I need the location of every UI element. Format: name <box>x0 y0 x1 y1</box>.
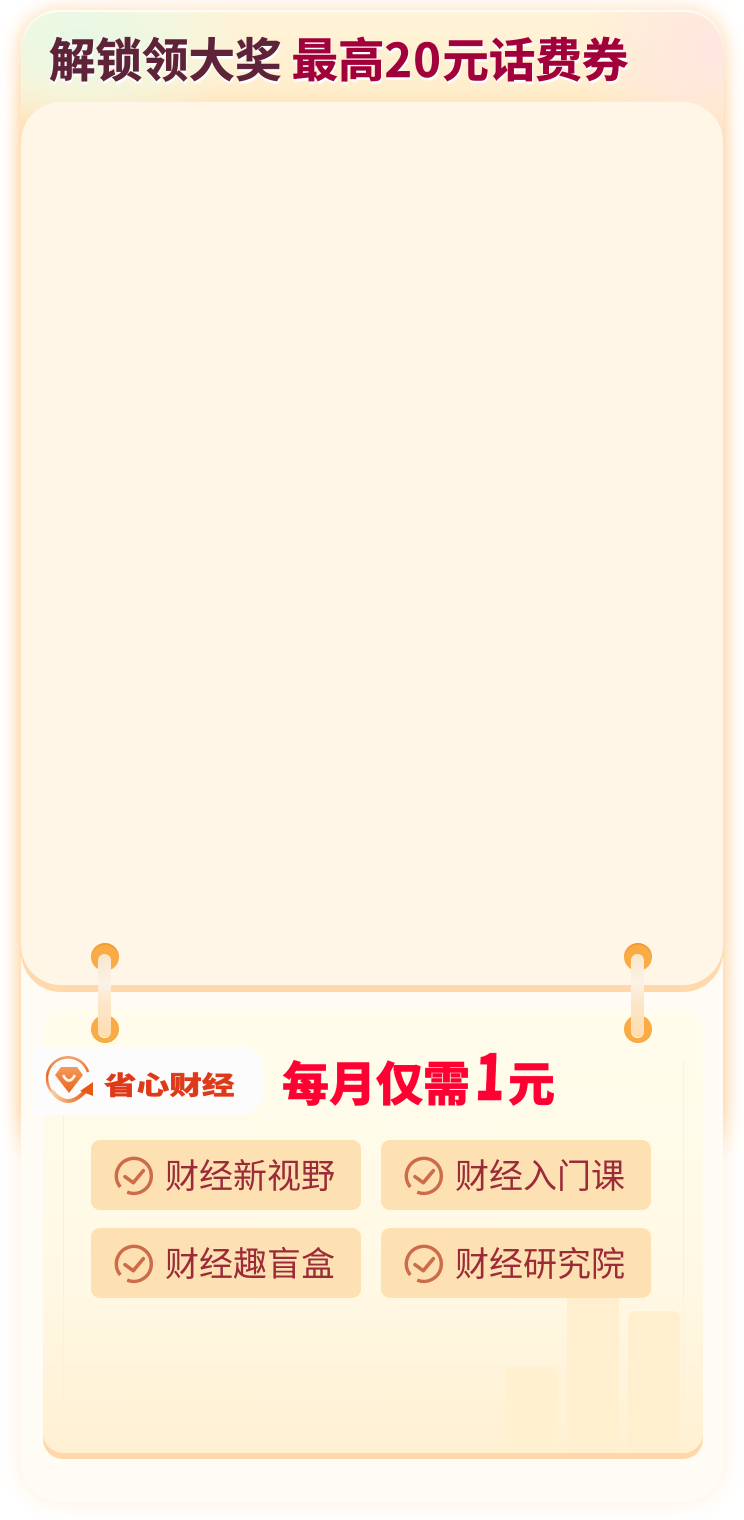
right ring binder <box>624 943 652 1043</box>
logo icon <box>46 1056 93 1103</box>
brand pill <box>34 1047 263 1115</box>
check icon <box>404 1244 444 1284</box>
logo text: 省心财经 <box>104 1066 235 1102</box>
check icon <box>114 1244 154 1284</box>
price headline <box>282 1028 555 1119</box>
inner outline frame <box>63 1060 684 1434</box>
check icon <box>114 1156 154 1196</box>
bottom eyelet <box>624 1015 652 1043</box>
price headline: 元 <box>508 1046 555 1115</box>
bar 3 <box>628 1311 680 1453</box>
title: 解锁领大奖最高20元话费券 <box>49 24 628 91</box>
decorative bars <box>505 1298 680 1416</box>
top blank card <box>21 102 723 985</box>
top eyelet <box>91 943 119 971</box>
bar 1 <box>505 1367 557 1453</box>
lower panel <box>43 1010 703 1453</box>
header gradient band <box>21 10 723 140</box>
label: 财经新视野 <box>165 1158 335 1196</box>
price headline: 每月仅需 <box>282 1046 470 1115</box>
feature chip 1 <box>91 1140 361 1210</box>
bar 2 <box>567 1298 619 1453</box>
label: 财经入门课 <box>455 1158 625 1196</box>
feature chip 4 <box>381 1228 651 1298</box>
left ring binder <box>91 943 119 1043</box>
check icon <box>404 1156 444 1196</box>
feature chip 2 <box>381 1140 651 1210</box>
band <box>98 954 111 1037</box>
label: 财经趣盲盒 <box>165 1246 335 1284</box>
card glow <box>8 2 736 1152</box>
price headline: 1 <box>473 1028 507 1119</box>
band <box>631 954 644 1037</box>
top eyelet <box>624 943 652 971</box>
feature chip 3 <box>91 1228 361 1298</box>
bottom eyelet <box>91 1015 119 1043</box>
label: 财经研究院 <box>455 1246 625 1284</box>
